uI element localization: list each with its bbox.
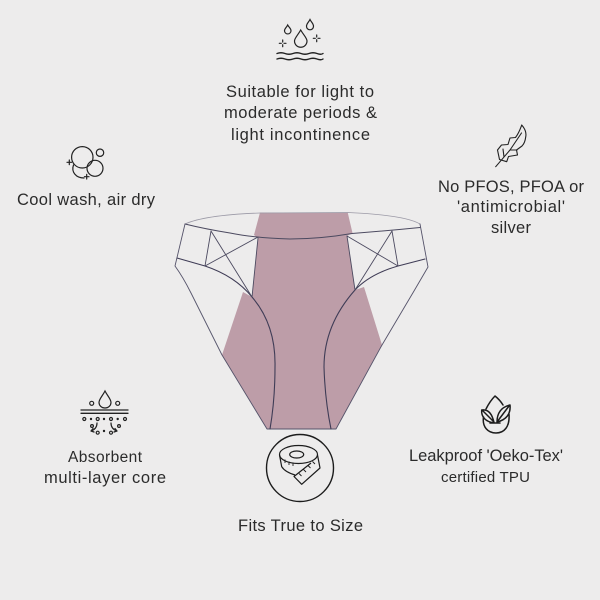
text: size: Fits True to Size [238, 517, 363, 535]
text: leakproof: certified TPU [441, 469, 530, 486]
waistband lower edge [185, 224, 420, 239]
icon: measuring tape in circle [266, 434, 334, 502]
icon: feather [496, 125, 526, 167]
left leg seam [177, 258, 275, 429]
icon: absorbent layers [81, 391, 128, 434]
right leg seam [324, 259, 425, 429]
leg outline [175, 224, 428, 429]
text: periods [224, 83, 377, 144]
text: wash: Cool wash, air dry [17, 191, 156, 209]
icon: water drops and waves [277, 20, 323, 60]
left mesh lines [205, 231, 258, 297]
text: no PFOS: No PFOS, PFOA or [438, 178, 584, 196]
text: periods: light incontinence [231, 126, 370, 144]
right mesh lines [347, 231, 398, 290]
text: no PFOS [438, 178, 584, 237]
text: no PFOS: silver [491, 219, 532, 237]
panel: mauve absorbent gusset [222, 212, 382, 429]
text: leakproof: Leakproof 'Oeko-Tex' [409, 447, 563, 465]
text: periods: Suitable for light to [226, 83, 374, 101]
text: absorbent: Absorbent [68, 449, 143, 466]
icon: bubbles [67, 147, 104, 179]
text: no PFOS: 'antimicrobial' [457, 198, 565, 216]
waistband top edge [185, 212, 420, 224]
text: absorbent: multi-layer core [44, 469, 166, 487]
text: absorbent [44, 449, 166, 487]
garment illustration [175, 212, 428, 429]
text: periods: moderate periods & [224, 104, 377, 122]
text: leakproof [409, 447, 563, 486]
icon: plant in drop [482, 396, 510, 433]
